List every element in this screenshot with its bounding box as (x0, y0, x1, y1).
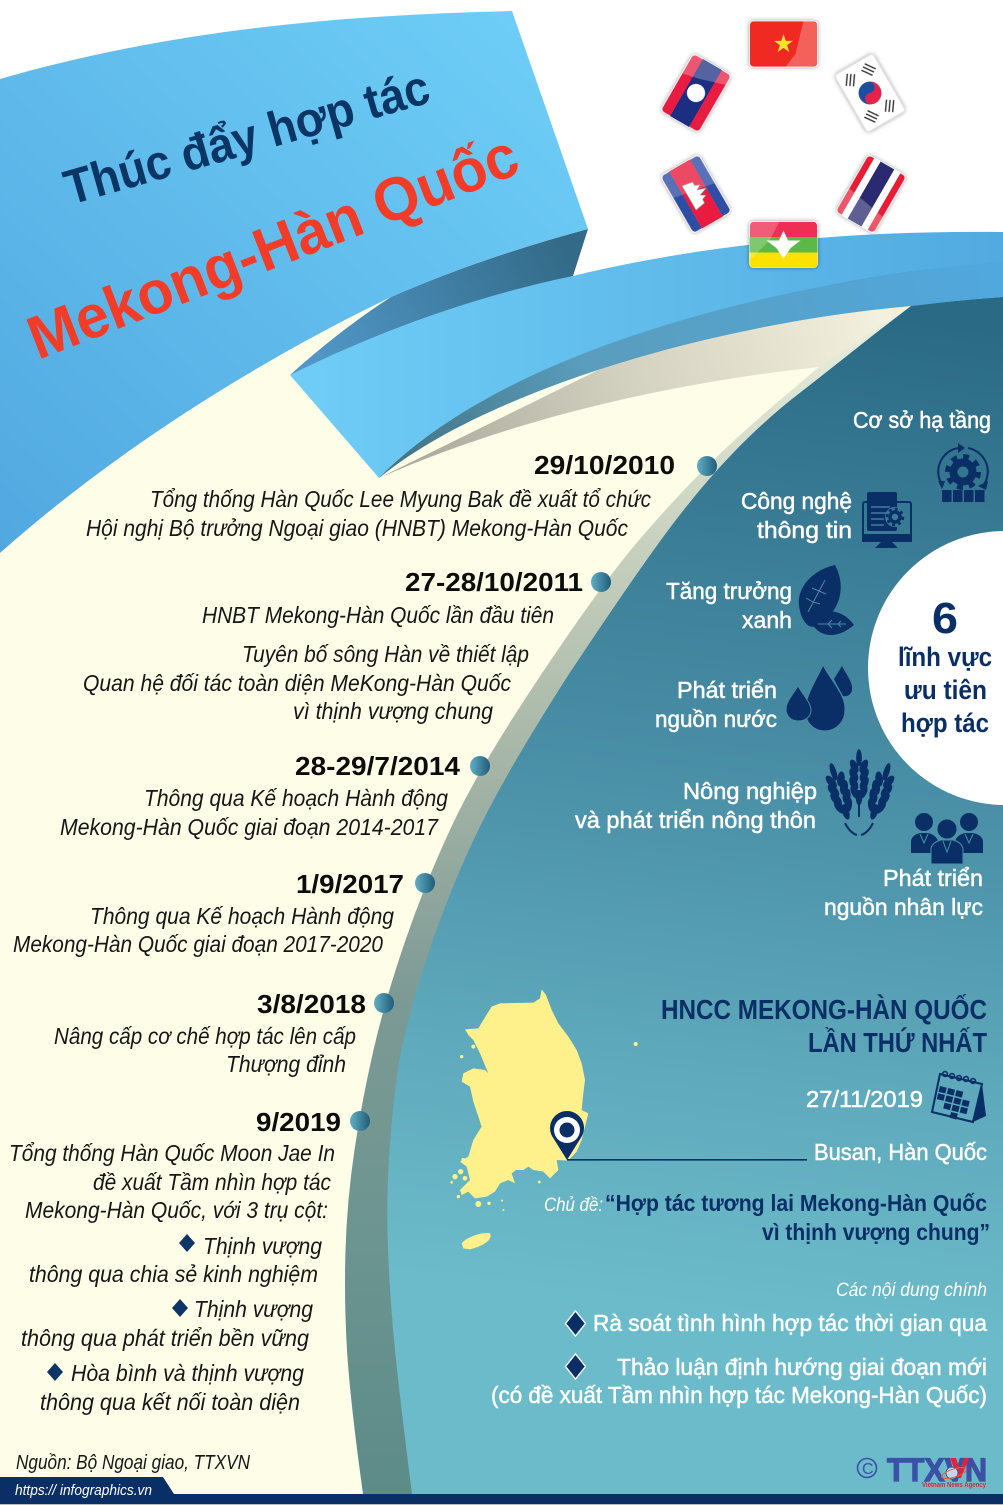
icon: leaves (799, 565, 854, 635)
timeline: 29/10/2010: 29/10/2010 (534, 450, 675, 480)
timeline: 9/2019: đề xuất Tầm nhìn hợp tác (93, 1169, 331, 1195)
main contents: Các nội dung chính (836, 1280, 987, 1301)
field: agriculture: và phát triển nông thôn (575, 807, 816, 833)
title: Thúc đẩy hợp tác (58, 60, 436, 216)
timeline: 27-28/10/2011: vì thịnh vượng chung (293, 698, 493, 724)
timeline: 9/2019: Thịnh vượng (203, 1233, 322, 1259)
timeline: 29/10/2010: Hội nghị Bộ trưởng Ngoại giao (HNBT) Mekong-Hàn Quốc (86, 515, 628, 541)
field: water resources: Phát triển (677, 677, 777, 703)
timeline: 1/9/2017 (13, 869, 404, 957)
field: human resources: nguồn nhân lực (824, 894, 983, 920)
timeline: 9/2019: Thịnh vượng (194, 1296, 313, 1322)
timeline: 27-28/10/2011: Tuyên bố sông Hàn về thiết lập (242, 641, 529, 667)
bottom bar (0, 1477, 1003, 1505)
timeline: 9/2019: thông qua chia sẻ kinh nghiệm (29, 1261, 318, 1287)
field: information technology: thông tin (757, 517, 852, 543)
logo: TTXVN: Vietnam News Agency (922, 1480, 987, 1489)
timeline: 28-29/7/2014: Thông qua Kế hoạch Hành động (144, 785, 448, 811)
flag: Myanmar (750, 222, 818, 268)
icon: computer (862, 492, 912, 548)
white circle: 6 priority fields: lĩnh vực (898, 642, 992, 672)
timeline: 28-29/7/2014: 28-29/7/2014 (295, 751, 461, 781)
timeline: 3/8/2018 (54, 989, 366, 1077)
timeline: 3/8/2018: Thượng đỉnh (226, 1051, 346, 1077)
main contents: (có đề xuất Tầm nhìn hợp tác Mekong-Hàn Quốc) (491, 1382, 987, 1408)
icon: people (911, 813, 983, 864)
white circle: 6 priority fields (868, 531, 1003, 805)
lower ribbon shading (379, 262, 1003, 478)
timeline: 29/10/2010 (86, 450, 675, 541)
timeline: 9/2019 (9, 1107, 341, 1415)
logo: TTXVN: C (862, 1461, 874, 1478)
field: infrastructure (853, 407, 991, 502)
summit location: Busan, Hàn Quốc (814, 1139, 987, 1165)
flag: Vietnam (750, 21, 818, 67)
main contents: Rà soát tình hình hợp tác thời gian qua (593, 1310, 987, 1336)
timeline: 29/10/2010: Tổng thống Hàn Quốc Lee Myung Bak đề xuất tổ chức (150, 486, 651, 512)
summit theme: Chủ đề: (544, 1195, 603, 1216)
field: information technology: Công nghệ (741, 488, 852, 514)
timeline dots (350, 456, 717, 1131)
timeline strip (345, 300, 1003, 1494)
flag: Thailand (835, 154, 907, 234)
white circle: 6 priority fields: ưu tiên (904, 675, 987, 705)
timeline: 9/2019: Mekong-Hàn Quốc, với 3 trụ cột: (25, 1197, 328, 1223)
lower ribbon band (290, 232, 1003, 478)
timeline: 28-29/7/2014 (60, 751, 461, 840)
timeline: 27-28/10/2011 (83, 567, 583, 724)
summit heading (661, 993, 987, 1058)
flags (660, 21, 907, 268)
icon: calendar (932, 1072, 986, 1122)
timeline: 27-28/10/2011: 27-28/10/2011 (405, 567, 583, 597)
white circle: 6 priority fields: 6 (932, 594, 958, 643)
field: human resources: Phát triển (883, 865, 983, 891)
flag: Laos (660, 53, 732, 133)
timeline: 9/2019: thông qua phát triển bền vững (21, 1325, 309, 1351)
timeline: 1/9/2017: Thông qua Kế hoạch Hành động (90, 903, 394, 929)
map: South Korea (450, 989, 638, 1249)
icon: wheat (819, 749, 901, 835)
bottom bar: https:// infographics.vn (15, 1482, 152, 1499)
field: human resources (824, 813, 983, 920)
cream page background (0, 290, 911, 1505)
main contents (491, 1280, 987, 1408)
paper fold shadow (379, 306, 911, 478)
main contents: Thảo luận định hướng giai đoạn mới (617, 1354, 987, 1380)
timeline: 1/9/2017: 1/9/2017 (296, 869, 404, 899)
field: agriculture: Nông nghiệp (683, 778, 817, 804)
summit theme (544, 1190, 990, 1245)
location pin: Busan (550, 1111, 584, 1160)
timeline: 9/2019: thông qua kết nối toàn diện (40, 1389, 300, 1415)
logo: TTXVN: TTXVN (887, 1452, 987, 1488)
timeline: 9/2019: 9/2019 (256, 1107, 341, 1137)
icon: water drops (786, 665, 852, 731)
icon: gear cycle (938, 443, 988, 502)
field: agriculture (575, 749, 901, 835)
timeline: 1/9/2017: Mekong-Hàn Quốc giai đoạn 2017-2020 (13, 931, 383, 957)
timeline: 9/2019: Tổng thống Hàn Quốc Moon Jae In (9, 1140, 335, 1166)
timeline: 27-28/10/2011: HNBT Mekong-Hàn Quốc lần đầu tiên (202, 602, 554, 628)
flag: Cambodia (660, 154, 732, 234)
white circle: 6 priority fields: hợp tác (901, 708, 989, 738)
title ribbon fold (290, 229, 588, 375)
field: information technology (741, 488, 912, 548)
field: infrastructure: Cơ sở hạ tầng (853, 407, 991, 433)
timeline: 28-29/7/2014: Mekong-Hàn Quốc giai đoạn 2014-2017 (60, 814, 439, 840)
timeline: 27-28/10/2011: Quan hệ đối tác toàn diện MeKong-Hàn Quốc (83, 670, 511, 696)
timeline: 9/2019: Hòa bình và thịnh vượng (71, 1360, 304, 1386)
title: Mekong-Hàn Quốc (18, 121, 528, 372)
field: water resources (655, 665, 852, 732)
flag: South Korea (834, 53, 906, 133)
summit date: 27/11/2019 (806, 1086, 923, 1112)
field: water resources: nguồn nước (655, 706, 777, 732)
source: Nguồn: Bộ Ngoại giao, TTXVN (16, 1452, 250, 1474)
timeline: 3/8/2018: 3/8/2018 (257, 989, 366, 1019)
field: green growth (666, 565, 854, 635)
Busan connector line (567, 1159, 807, 1161)
field: green growth: Tăng trưởng (666, 578, 792, 604)
field: green growth: xanh (742, 607, 792, 633)
title ribbon (0, 11, 588, 553)
teal panel (387, 290, 1003, 1494)
timeline: 3/8/2018: Nâng cấp cơ chế hợp tác lên cấp (54, 1023, 356, 1049)
